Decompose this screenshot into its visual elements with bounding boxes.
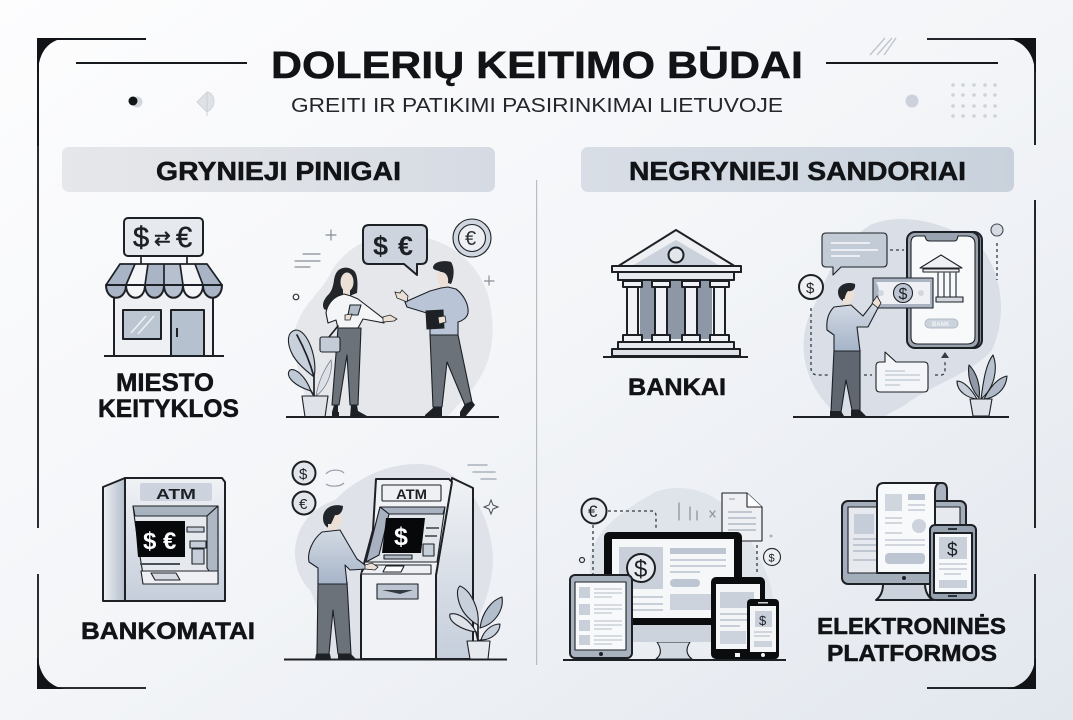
tablet left bbox=[570, 575, 632, 658]
ground bbox=[284, 658, 507, 660]
illustration: person at ATM bbox=[284, 462, 507, 660]
euro coin and dashed lines bbox=[580, 498, 757, 575]
icon: online platforms bbox=[842, 483, 976, 600]
coins: € bbox=[299, 496, 308, 513]
desktop monitor: $ bbox=[634, 556, 647, 583]
label: city exchange offices: KEITYKLOS bbox=[98, 395, 239, 423]
icon: bank building bbox=[603, 230, 748, 358]
text bubble top bbox=[822, 233, 887, 275]
title: DOLERIŲ KEITIMO BŪDAI bbox=[271, 45, 803, 87]
label: banks: BANKAI bbox=[628, 374, 726, 401]
speech bubble bbox=[363, 225, 427, 275]
ATM machine bbox=[361, 478, 473, 659]
icon: exchange shop: ⇄ bbox=[154, 228, 171, 250]
background blob bbox=[590, 488, 774, 640]
speech bubble: $ bbox=[373, 231, 388, 261]
woman bbox=[320, 268, 397, 417]
coins: $ bbox=[299, 466, 308, 483]
panel heading: cashless: NEGRYNIEJI SANDORIAI bbox=[629, 156, 966, 186]
icon: ATM: ATM bbox=[156, 486, 196, 503]
coin bbox=[453, 219, 491, 257]
desktop monitor bbox=[604, 532, 742, 659]
illustration: person with banking app bbox=[793, 219, 1009, 418]
man bbox=[395, 261, 475, 417]
icon: exchange shop: $ bbox=[133, 222, 149, 254]
dollar coin: $ bbox=[806, 280, 815, 297]
ground bbox=[793, 416, 1009, 418]
dashed connectors bbox=[811, 224, 1003, 375]
document bbox=[722, 493, 762, 541]
phone: BANK bbox=[932, 322, 950, 328]
banknote bbox=[873, 278, 933, 308]
man bbox=[309, 505, 378, 659]
accents bbox=[293, 230, 494, 300]
icon: ATM: $ bbox=[143, 528, 157, 555]
small dollar coin bbox=[764, 534, 780, 566]
accents bbox=[468, 465, 498, 514]
ATM machine: ATM bbox=[396, 486, 427, 502]
plant bbox=[957, 355, 1007, 416]
coins bbox=[292, 462, 344, 514]
phone bbox=[907, 232, 982, 348]
label: ATMs: BANKOMATAI bbox=[81, 618, 255, 645]
illustration: multiple devices bbox=[563, 488, 786, 661]
plant bbox=[288, 330, 331, 417]
label: electronic platforms: ELEKTRONINĖS bbox=[817, 613, 1006, 639]
ground bbox=[563, 659, 786, 661]
panel heading: cash bbox=[62, 147, 495, 192]
icon: ATM: € bbox=[163, 528, 176, 555]
phone bbox=[747, 599, 779, 659]
phone: $ bbox=[759, 613, 767, 628]
plant bbox=[450, 586, 502, 659]
title decoration left bbox=[76, 62, 247, 116]
panel heading: cashless bbox=[581, 147, 1014, 192]
small dollar coin: $ bbox=[768, 552, 775, 564]
man bbox=[827, 283, 881, 416]
central divider bbox=[536, 180, 537, 665]
illustration: two people exchanging money bbox=[286, 219, 499, 418]
icon: online platforms: $ bbox=[947, 540, 958, 561]
icon: ATM bbox=[103, 478, 225, 601]
label: electronic platforms bbox=[817, 613, 1006, 666]
label: electronic platforms: PLATFORMOS bbox=[827, 640, 997, 666]
label: city exchange offices bbox=[98, 369, 239, 423]
icon: exchange shop: € bbox=[176, 222, 192, 254]
ground bbox=[286, 416, 499, 418]
icon: exchange shop bbox=[104, 218, 224, 357]
subtitle: GREITI IR PATIKIMI PASIRINKIMAI LIETUVOJE bbox=[291, 95, 783, 117]
ATM machine: $ bbox=[394, 523, 408, 551]
dollar coin bbox=[799, 275, 823, 299]
tablet right bbox=[711, 577, 765, 659]
panel heading: cash: GRYNIEJI PINIGAI bbox=[156, 156, 401, 186]
coin: € bbox=[465, 228, 476, 250]
background blob bbox=[804, 219, 1001, 416]
banknote: $ bbox=[898, 286, 908, 303]
speech bubble: € bbox=[398, 231, 413, 261]
label: city exchange offices: MIESTO bbox=[116, 369, 214, 397]
background blob bbox=[295, 464, 493, 658]
text bubble bottom bbox=[876, 352, 928, 392]
background blob bbox=[292, 234, 493, 416]
title decoration right bbox=[826, 38, 998, 118]
euro coin and dashed lines: € bbox=[588, 502, 598, 521]
